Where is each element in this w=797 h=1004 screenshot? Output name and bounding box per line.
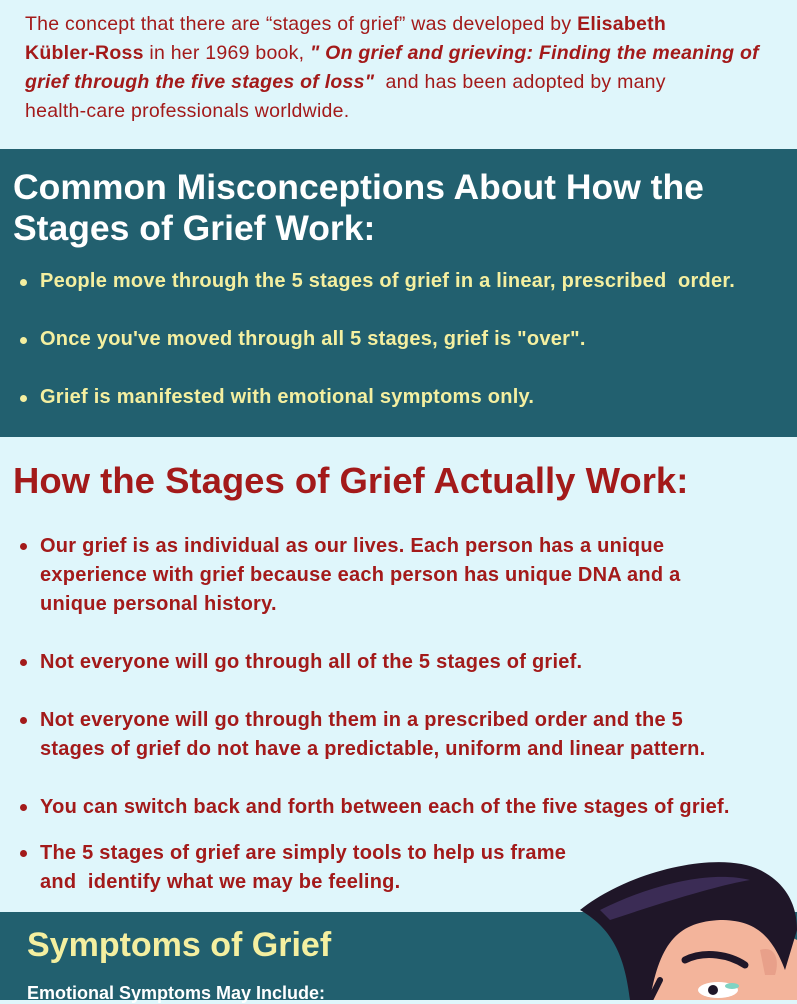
heading: symptoms: Symptoms of Grief <box>27 926 331 964</box>
actual list: stages of grief do not have a predictable, uniform and linear pattern. <box>40 738 705 760</box>
actual list: and identify what we may be feeling. <box>40 871 400 893</box>
subheading: emotional symptoms: Emotional Symptoms May Include: <box>27 983 325 1003</box>
intro text: grief through the five stages of loss" and has been adopted by many <box>25 71 666 93</box>
intro text <box>25 13 760 122</box>
actual list: You can switch back and forth between each of the five stages of grief. <box>40 796 730 818</box>
actual list: Not everyone will go through them in a prescribed order and the 5 <box>40 709 683 731</box>
actual list <box>20 535 730 893</box>
misconceptions list <box>20 270 735 408</box>
actual list: experience with grief because each person has unique DNA and a <box>40 564 680 586</box>
actual list: Our grief is as individual as our lives. Each person has a unique <box>40 535 664 557</box>
heading: misconceptions: Stages of Grief Work: <box>13 208 375 248</box>
panel: symptoms <box>0 912 797 1000</box>
intro text: The concept that there are “stages of grief” was developed by Elisabeth <box>25 13 666 35</box>
heading: misconceptions: Common Misconceptions About How the <box>13 167 704 207</box>
heading: misconceptions <box>13 167 704 248</box>
actual list: unique personal history. <box>40 593 277 615</box>
intro text: Kübler-Ross in her 1969 book, " On grief and grieving: Finding the meaning of <box>25 42 759 64</box>
misconceptions list: Once you've moved through all 5 stages, grief is "over". <box>40 328 586 350</box>
misconceptions list: People move through the 5 stages of grief in a linear, prescribed order. <box>40 270 735 292</box>
actual list: The 5 stages of grief are simply tools to help us frame <box>40 842 566 864</box>
heading: actual: How the Stages of Grief Actually Work: <box>13 460 688 501</box>
panel: misconceptions <box>0 149 797 437</box>
actual list: Not everyone will go through all of the 5 stages of grief. <box>40 651 582 673</box>
intro text: health-care professionals worldwide. <box>25 100 349 122</box>
icon: sad face illustration <box>580 862 797 1000</box>
misconceptions list: Grief is manifested with emotional symptoms only. <box>40 386 534 408</box>
